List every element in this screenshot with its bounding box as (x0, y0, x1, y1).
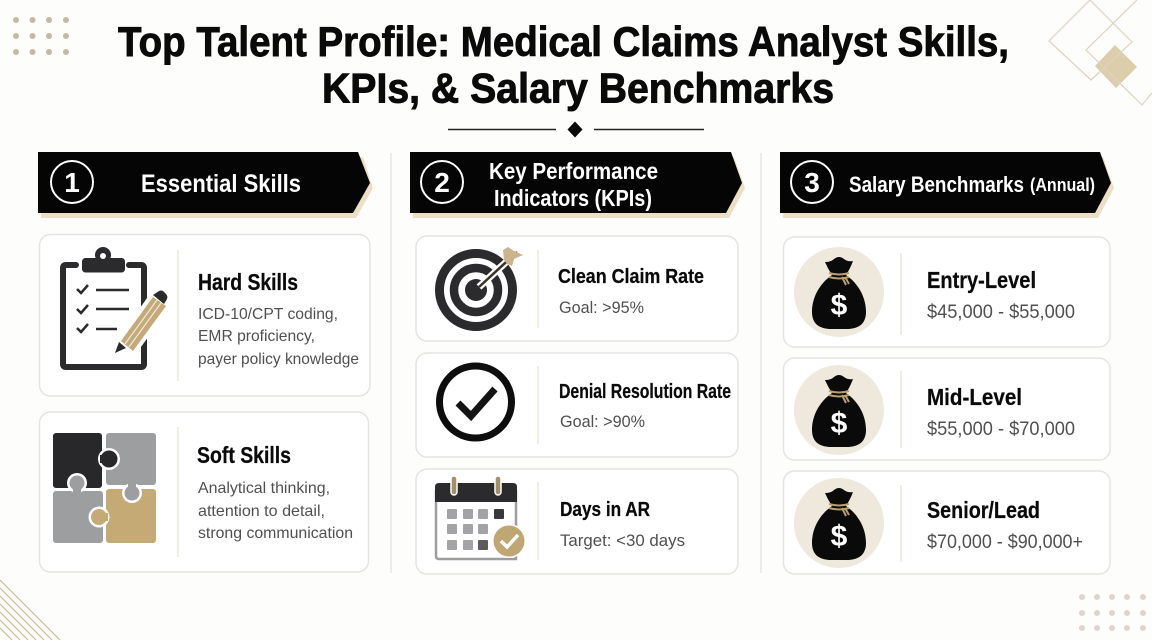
icon: money bag (794, 365, 884, 455)
icon: puzzle (53, 433, 156, 543)
decoration: bottom-left diagonal lines (0, 580, 60, 640)
card: senior/lead: $70,000 - $90,000+ (927, 532, 1083, 553)
card: mid-level (784, 358, 1110, 460)
card: days in AR: Target: <30 days (560, 531, 685, 550)
decoration: top-right diamonds (1049, 0, 1152, 105)
card: soft skills: Analytical thinking, (198, 480, 330, 497)
card: hard skills: Hard Skills (198, 269, 298, 295)
card: hard skills: ICD-10/CPT coding, (198, 306, 338, 323)
card: senior/lead (784, 471, 1110, 574)
card: denial resolution rate: Denial Resolution Rate (559, 381, 731, 403)
decoration: top-left dots (13, 17, 69, 55)
card: hard skills (40, 234, 370, 396)
card: entry-level: $45,000 - $55,000 (927, 302, 1075, 323)
card: mid-level: Mid-Level (927, 384, 1022, 410)
icon: money bag: $ (831, 407, 848, 440)
icon: calendar (435, 476, 526, 559)
panel: salary benchmarks (780, 152, 1114, 574)
card: entry-level: Entry-Level (927, 267, 1036, 293)
card: clean claim rate: Goal: >95% (559, 298, 644, 317)
banner: salary benchmarks: (Annual) (1030, 175, 1095, 195)
decoration: bottom-right dots (1079, 594, 1146, 631)
banner: KPIs: Indicators (KPIs) (494, 185, 652, 211)
banner: KPIs: Key Performance (489, 158, 658, 184)
card: days in AR (416, 469, 738, 574)
banner: salary benchmarks (780, 152, 1114, 218)
card: soft skills: Soft Skills (197, 442, 291, 468)
icon: clipboard with pencil (63, 247, 172, 367)
icon: money bag: $ (831, 520, 848, 553)
icon: money bag (794, 478, 884, 568)
title (118, 18, 1009, 112)
icon: target with arrow (440, 247, 523, 326)
icon: money bag: $ (831, 289, 848, 322)
card: soft skills: attention to detail, (198, 503, 325, 520)
card: hard skills: payer policy knowledge (198, 351, 359, 368)
card: soft skills (40, 412, 368, 572)
banner: essential skills: Essential Skills (141, 170, 301, 198)
title divider with diamond (448, 122, 704, 138)
card: days in AR: Days in AR (560, 499, 650, 521)
icon: money bag (794, 247, 884, 337)
banner: salary benchmarks: Salary Benchmarks (849, 172, 1024, 197)
banner: salary benchmarks: 3 (804, 167, 820, 198)
card: clean claim rate (416, 236, 738, 341)
card: entry-level (784, 237, 1110, 347)
card: denial resolution rate: Goal: >90% (560, 412, 645, 431)
banner: KPIs: 2 (434, 167, 450, 198)
panel: essential skills (38, 152, 373, 572)
icon: check circle (440, 366, 512, 438)
panel: key performance indicators (410, 152, 745, 574)
card: hard skills: EMR proficiency, (198, 328, 315, 345)
banner: essential skills (38, 152, 373, 218)
card: denial resolution rate (416, 353, 738, 457)
title: Top Talent Profile: Medical Claims Analyst Skills, (118, 18, 1009, 65)
banner: essential skills: 1 (64, 167, 80, 198)
card: senior/lead: Senior/Lead (927, 497, 1040, 523)
card: clean claim rate: Clean Claim Rate (558, 266, 704, 288)
card: mid-level: $55,000 - $70,000 (927, 419, 1075, 440)
title: KPIs, & Salary Benchmarks (322, 64, 834, 112)
banner: KPIs (410, 152, 745, 218)
card: soft skills: strong communication (198, 525, 353, 542)
